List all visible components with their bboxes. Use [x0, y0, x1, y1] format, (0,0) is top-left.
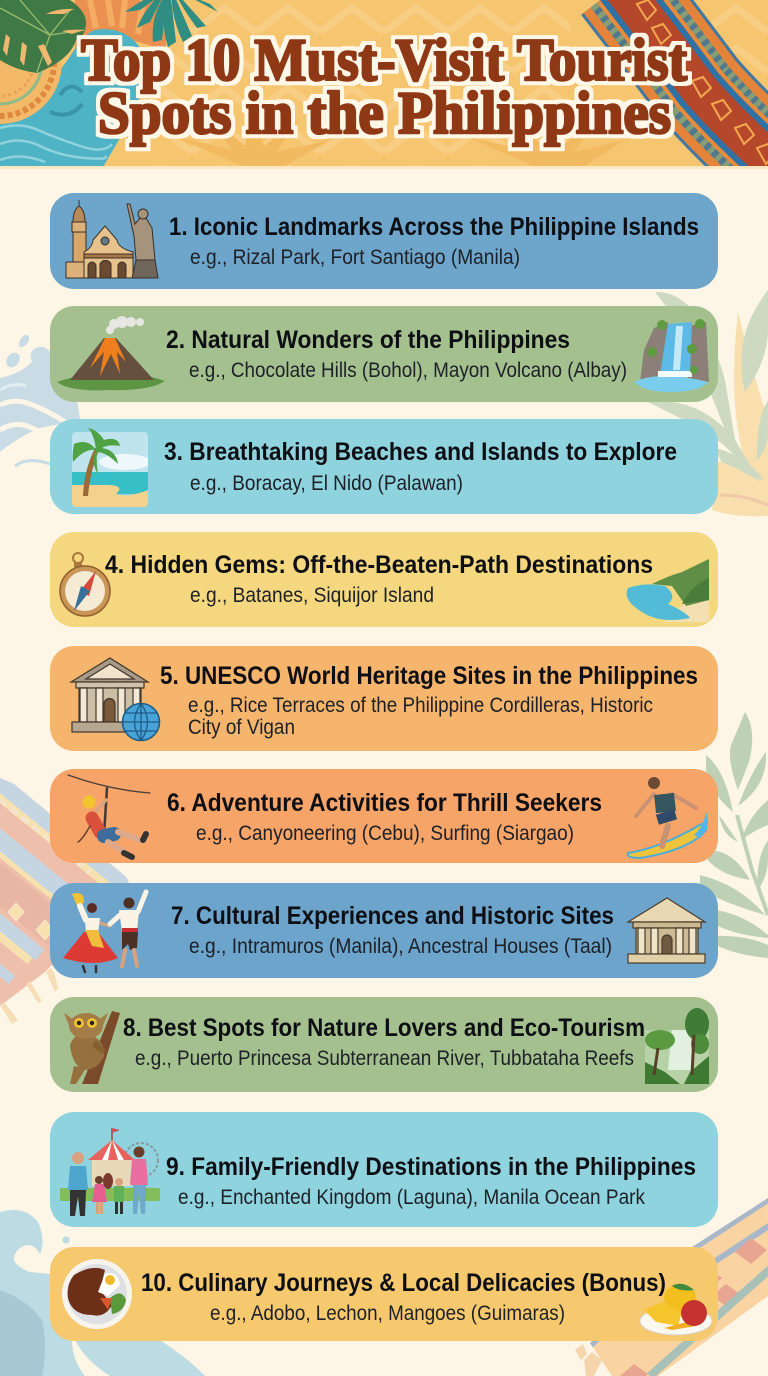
- panel 3: beaches: [50, 419, 718, 514]
- icon: folk dancers: [63, 892, 146, 972]
- panel 3 heading: 3. Breathtaking Beaches and Islands to Explore: [164, 438, 677, 466]
- panel 5 examples: City of Vigan: [188, 716, 295, 739]
- panel 6: adventure: [50, 769, 718, 863]
- panel 7: culture: [50, 883, 718, 978]
- header: monstera leaf: [0, 0, 86, 73]
- panel 5 examples: e.g., Rice Terraces of the Philippine Cordilleras, Historic: [188, 694, 653, 717]
- decoration: right palm frond: [700, 712, 768, 958]
- title: Spots in the Philippines: [98, 80, 671, 146]
- decoration: left waves: [0, 333, 85, 466]
- icon: coastal cove: [627, 559, 709, 622]
- icon: family at carnival: [60, 1128, 160, 1216]
- title: [81, 27, 687, 146]
- panel 1 heading: 1. Iconic Landmarks Across the Philippine Islands: [169, 213, 699, 241]
- icon: beach and palm: [72, 428, 151, 507]
- icon: mango plate: [640, 1284, 712, 1335]
- icon: surfer: [628, 777, 708, 858]
- header: orange stripes block: [75, 0, 166, 50]
- panel 10 heading: 10. Culinary Journeys & Local Delicacies (Bonus): [141, 1269, 666, 1297]
- panel 5: UNESCO: [50, 646, 718, 751]
- panel 9: family-friendly: [50, 1112, 718, 1227]
- title: Top 10 Must-Visit Tourist: [81, 27, 687, 93]
- header: fan palm: [125, 0, 218, 47]
- panel 5 examples: [188, 694, 653, 739]
- panel 1: iconic landmarks: [50, 193, 718, 289]
- decoration: bottom-right woven textile: [575, 1190, 768, 1376]
- panel 2 heading: 2. Natural Wonders of the Philippines: [166, 326, 570, 354]
- header: teal wave blob: [0, 29, 146, 169]
- icon: waterfall: [634, 319, 709, 392]
- panel 9 examples: e.g., Enchanted Kingdom (Laguna), Manila Ocean Park: [178, 1186, 645, 1209]
- panel 3 examples: e.g., Boracay, El Nido (Palawan): [190, 472, 463, 495]
- panel 4 heading: 4. Hidden Gems: Off-the-Beaten-Path Destinations: [105, 551, 653, 579]
- header banner: [0, 0, 768, 178]
- panel 7 heading: 7. Cultural Experiences and Historic Sites: [171, 902, 614, 930]
- icon: jungle: [645, 1008, 709, 1084]
- icon: church and statue: [66, 200, 158, 278]
- icon: zipline rider: [68, 775, 150, 857]
- icon: volcano: [57, 316, 165, 390]
- panel 10 examples: e.g., Adobo, Lechon, Mangoes (Guimaras): [210, 1302, 565, 1325]
- icon: tarsier on branch: [64, 1011, 120, 1084]
- panel 2 examples: e.g., Chocolate Hills (Bohol), Mayon Volcano (Albay): [189, 359, 627, 382]
- decoration: right leaves: [648, 290, 768, 516]
- panel 5 heading: 5. UNESCO World Heritage Sites in the Philippines: [160, 662, 698, 690]
- panel 8: nature and eco-tourism: [50, 997, 718, 1092]
- panel 2: natural wonders: [50, 306, 718, 402]
- header: sun: [0, 60, 62, 124]
- panel 7 examples: e.g., Intramuros (Manila), Ancestral Houses (Taal): [189, 935, 612, 958]
- panel 9 heading: 9. Family-Friendly Destinations in the Philippines: [166, 1153, 696, 1181]
- header: palm motifs: [179, 118, 624, 166]
- panel 8 heading: 8. Best Spots for Nature Lovers and Eco-Tourism: [123, 1014, 645, 1042]
- panel 6 heading: 6. Adventure Activities for Thrill Seekers: [167, 789, 602, 817]
- panel 8 examples: e.g., Puerto Princesa Subterranean River, Tubbataha Reefs: [135, 1047, 634, 1070]
- decoration: bottom-left wave: [0, 1210, 205, 1376]
- panel 6 examples: e.g., Canyoneering (Cebu), Surfing (Siargao): [196, 822, 574, 845]
- panel 10: culinary: [50, 1247, 718, 1341]
- icon: classical temple: [628, 898, 705, 963]
- icon: heritage building and globe: [71, 658, 160, 740]
- panel 1 examples: e.g., Rizal Park, Fort Santiago (Manila): [190, 246, 520, 269]
- decoration: left woven textile: [0, 778, 128, 1024]
- icon: compass: [60, 553, 110, 616]
- panel 4: hidden gems: [50, 532, 718, 627]
- header: woven textile band: [620, 0, 768, 178]
- panel 4 examples: e.g., Batanes, Siquijor Island: [190, 584, 434, 607]
- icon: adobo plate: [62, 1259, 132, 1329]
